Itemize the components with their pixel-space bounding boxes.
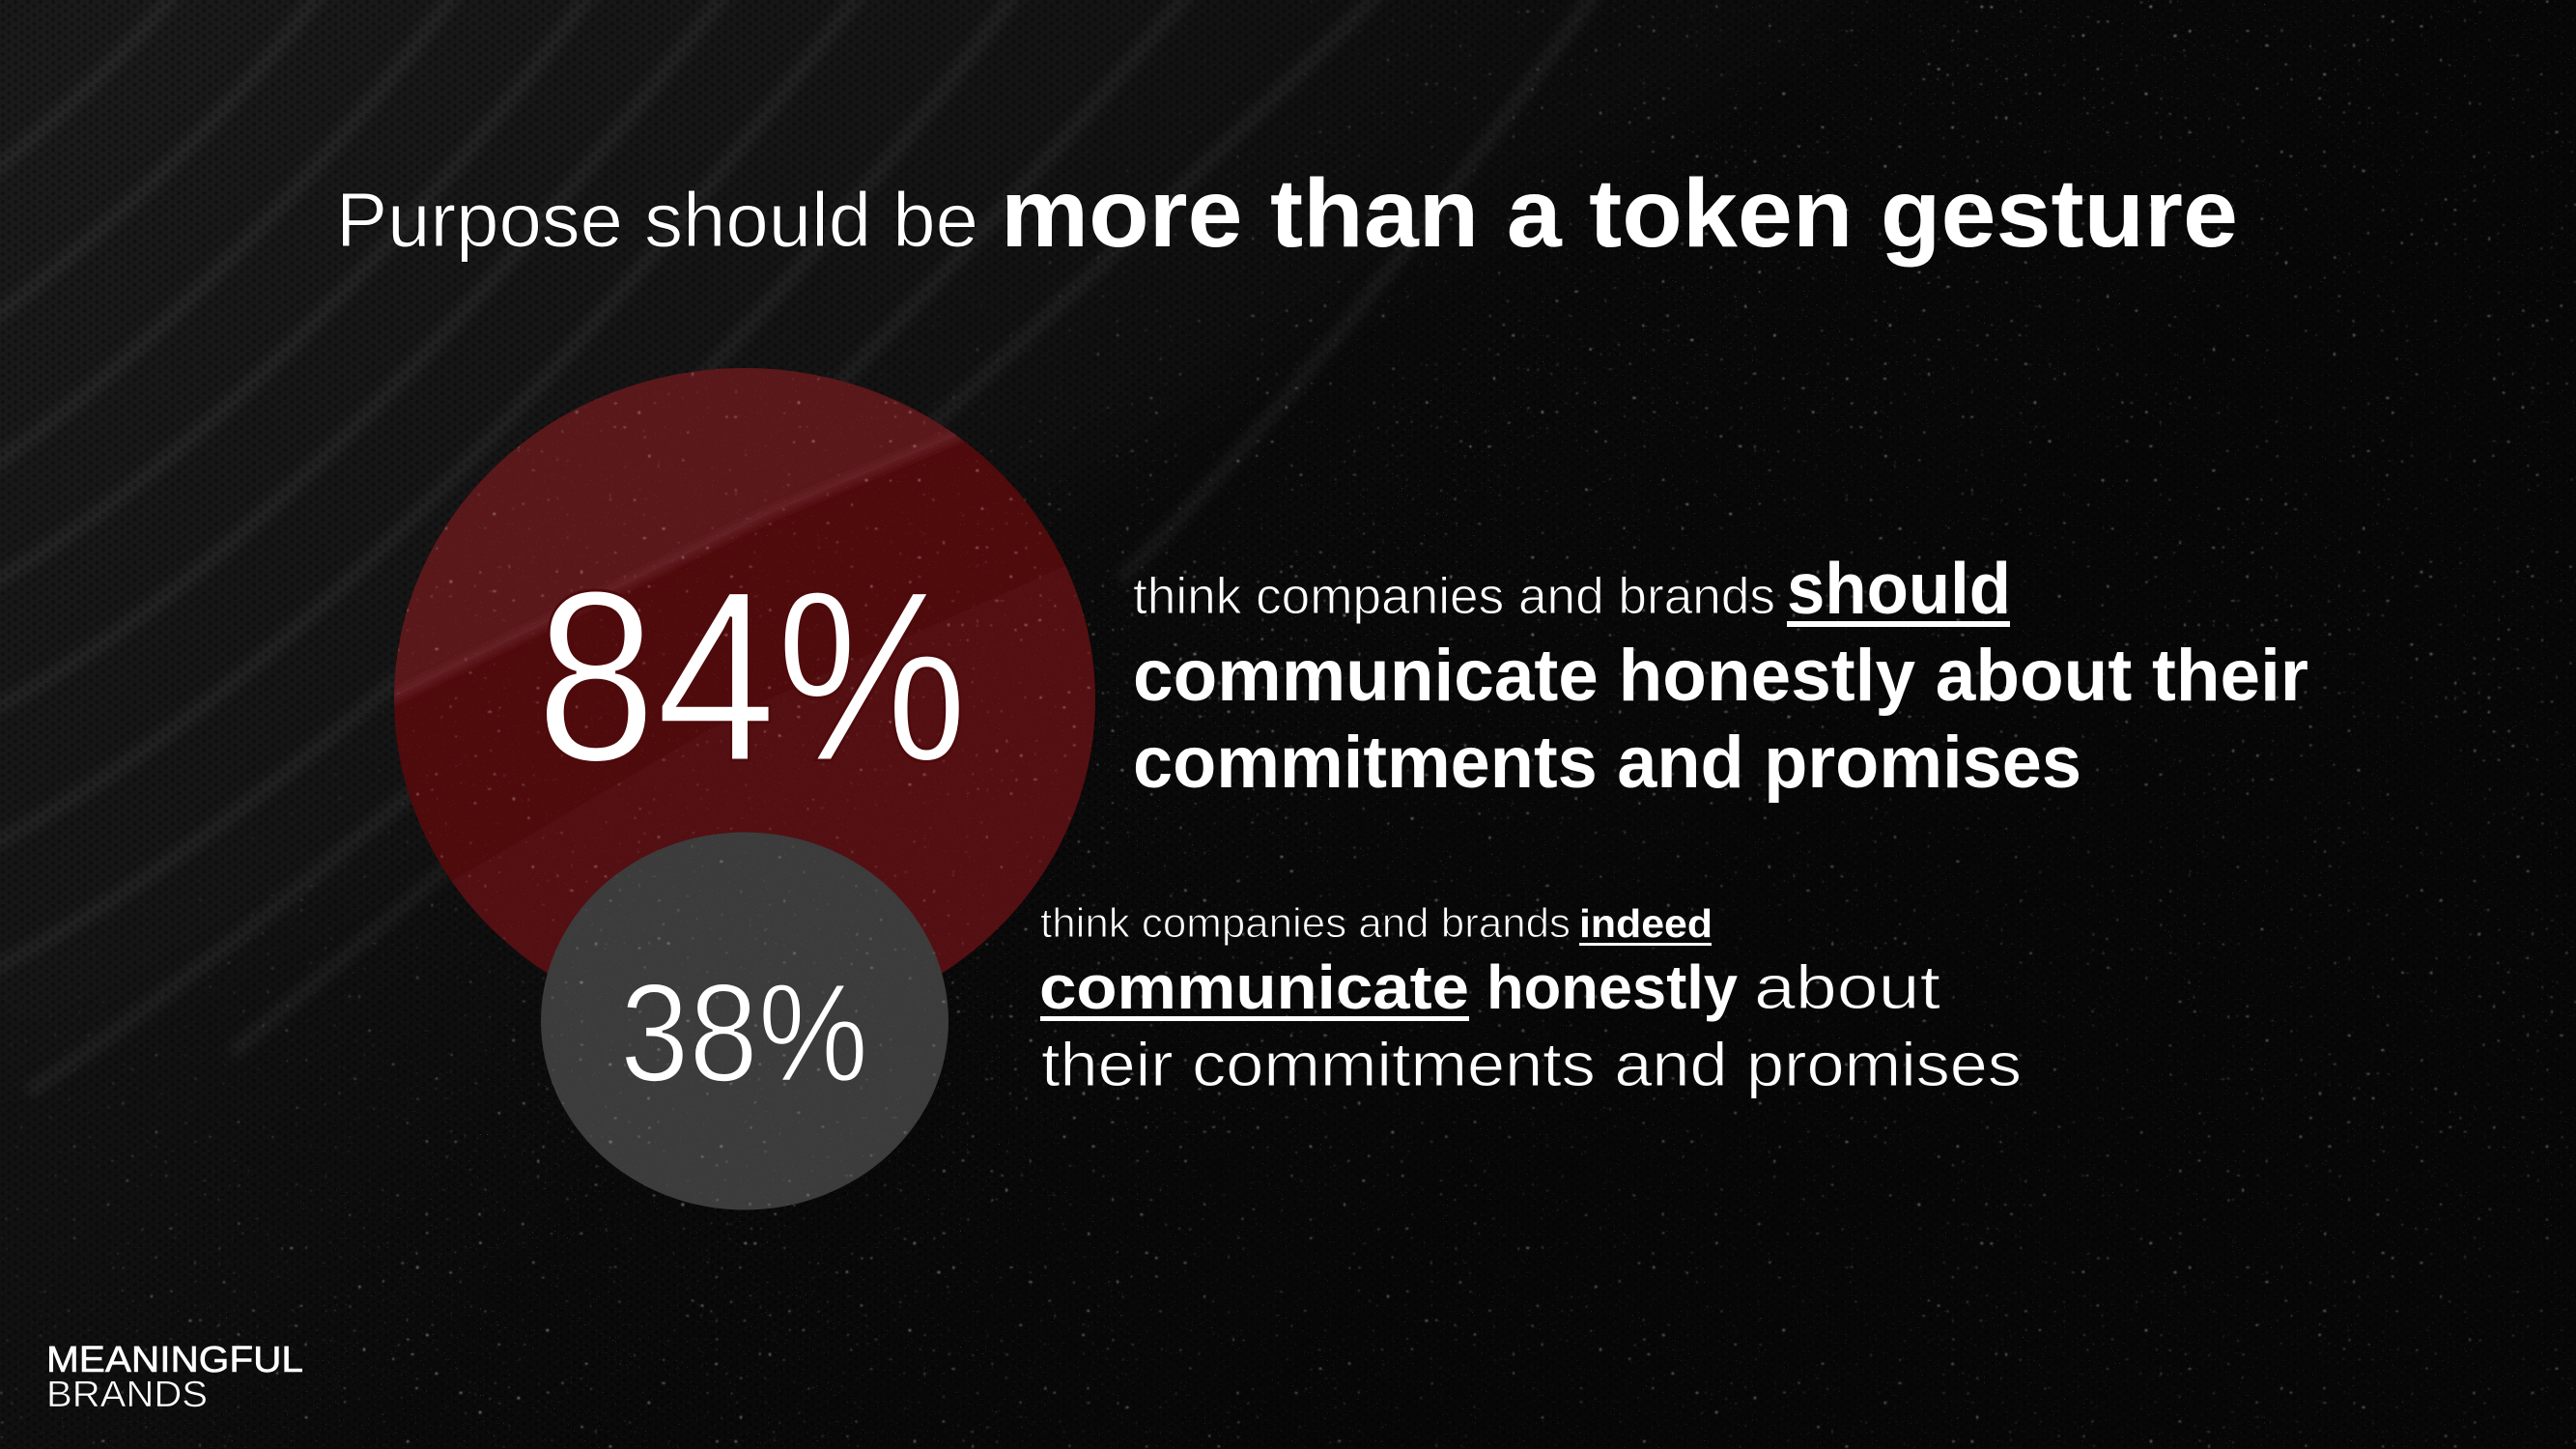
statement: should communicate honestly: commitments and promises (1133, 722, 2081, 804)
statement: should communicate honestly: should (1787, 548, 2011, 629)
statement: indeed communicate honestly: honestly (1486, 952, 1738, 1022)
statement: indeed communicate honestly: indeed (1579, 901, 1713, 946)
statistic: 84%: 84% (536, 541, 968, 812)
title: more than a token gesture (1001, 159, 2238, 268)
statement: should communicate honestly: think companies and brands (1133, 568, 1775, 625)
logo: Meaningful Brands (46, 1340, 303, 1415)
statement: indeed communicate honestly: communicate (1039, 952, 1469, 1022)
statement: should communicate honestly (1133, 548, 2308, 804)
statement: should communicate honestly: communicate honestly about their (1133, 635, 2308, 717)
title: Purpose should be (336, 177, 978, 263)
title (336, 159, 2238, 268)
statement: indeed communicate honestly (1039, 900, 2022, 1099)
logo: Meaningful Brands: MEANINGFUL (46, 1340, 303, 1380)
logo: Meaningful Brands: BRANDS (46, 1375, 208, 1415)
statistic: 38%: 38% (620, 954, 868, 1111)
circle: 38% grey (531, 821, 956, 1217)
statement: indeed communicate honestly: their commitments and promises (1041, 1030, 2022, 1099)
circle: 84% red (394, 368, 1095, 974)
statement: indeed communicate honestly: about (1754, 952, 1940, 1022)
statement: indeed communicate honestly: think companies and brands (1040, 900, 1571, 947)
